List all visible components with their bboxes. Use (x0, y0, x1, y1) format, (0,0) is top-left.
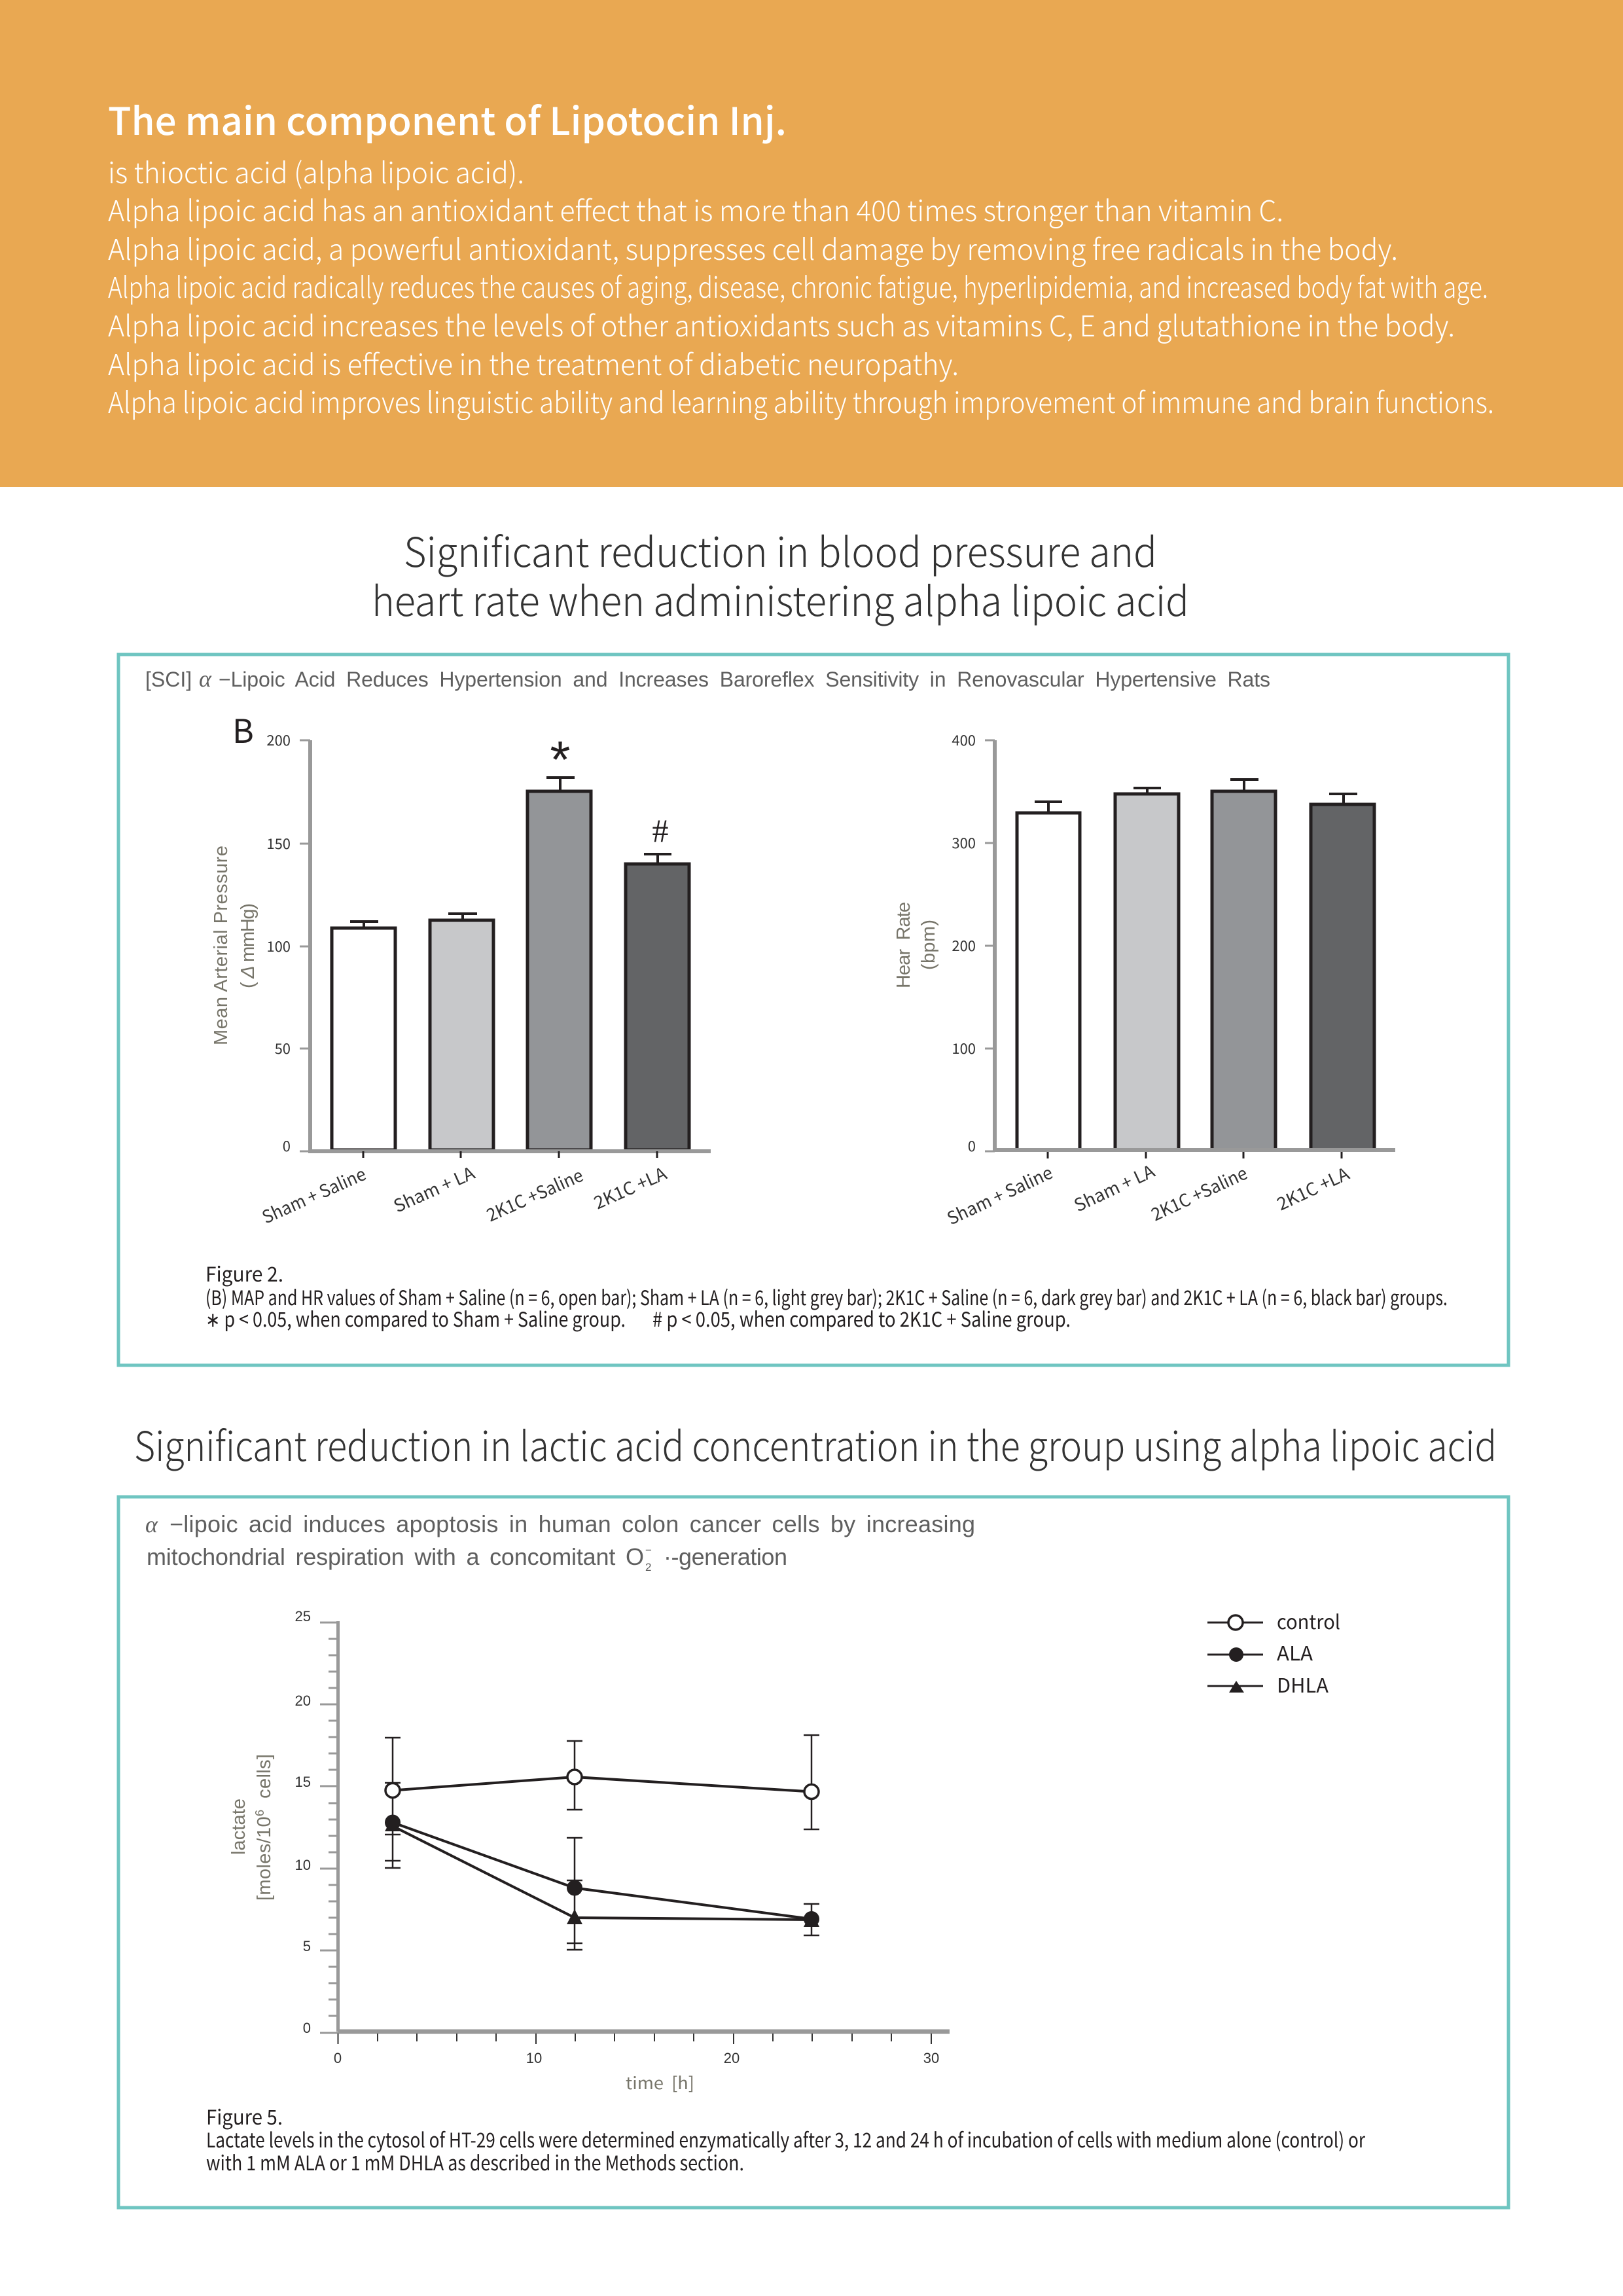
error bars (385, 1735, 819, 1950)
line chart: lactate levels: time [h] (626, 2070, 694, 2094)
bar chart: mean arterial pressure (211, 706, 711, 1229)
heading: blood pressure and heart rate (372, 520, 1189, 628)
bar chart: heart rate: 0 (968, 1135, 976, 1156)
line chart: lactate levels: 25 (295, 1608, 311, 1624)
panel title: −Lipoic Acid Reduces Hypertension and Increases Baroreflex Sensitivity in Renovascular Hypertensive Rats (219, 668, 1270, 691)
bar chart: mean arterial pressure: Mean Arterial Pressure (211, 846, 232, 1045)
figure 5 caption: Figure 5. (206, 2101, 283, 2130)
bar chart: mean arterial pressure: ( Δ mmHg) (238, 903, 259, 988)
panel title: −lipoic acid induces apoptosis in human colon cancer cells by increasing (169, 1511, 975, 1537)
banner body text (108, 150, 1494, 422)
bar chart: heart rate: 300 (952, 832, 976, 853)
figure 5 caption: with 1 mM ALA or 1 mM DHLA as described in the Methods section. (206, 2147, 744, 2176)
line chart: lactate levels (228, 1606, 1340, 2094)
line chart: lactate levels: 20 (295, 1693, 311, 1709)
bar chart: heart rate: Sham + Saline (942, 1158, 1056, 1230)
line chart: lactate levels: 20 (724, 2050, 740, 2066)
panel title: − (645, 1544, 652, 1556)
heading: blood pressure and heart rate: Significant reduction in blood pressure and (404, 520, 1157, 579)
banner body text: is thioctic acid (alpha lipoic acid). (108, 150, 524, 192)
bar chart: mean arterial pressure: 150 (266, 833, 291, 853)
banner body text: Alpha lipoic acid is effective in the treatment of diabetic neuropathy. (108, 342, 959, 384)
bar chart: heart rate: 200 (952, 935, 976, 956)
line chart: lactate levels: 30 (923, 2050, 939, 2066)
heading: blood pressure and heart rate: heart rate when administering alpha lipoic acid (372, 569, 1189, 628)
bar chart: heart rate: Sham + LA (1069, 1157, 1159, 1217)
bar chart: mean arterial pressure: 100 (266, 935, 291, 956)
figure 2 caption: Figure 2. (205, 1258, 283, 1287)
figure 5 caption: Lactate levels in the cytosol of HT-29 cells were determined enzymatically after 3, 12 and 24 h of incubation of cells with medium alone (control) or (206, 2124, 1366, 2153)
bar chart: heart rate: Hear Rate (893, 902, 914, 988)
bar chart: heart rate: 400 (952, 729, 976, 750)
figure 2 caption (205, 1258, 1448, 1333)
line chart: lactate levels: [moles/10 (254, 1816, 275, 1901)
header banner (0, 0, 1623, 487)
figure 2 caption: ∗ p < 0.05, when compared to Sham + Saline group. (205, 1303, 626, 1333)
bar chart: heart rate (893, 729, 1395, 1230)
bar chart: mean arterial pressure: 2K1C +LA (589, 1159, 671, 1214)
bar chart: mean arterial pressure: 2K1C +Saline (482, 1161, 587, 1227)
line chart: lactate levels: lactate (228, 1799, 249, 1855)
heading: lactic acid concentration: Significant reduction in lactic acid concentration in the group using alpha lipoic acid (134, 1414, 1497, 1473)
series: DHLA (385, 1817, 819, 1927)
bar chart: heart rate: 100 (952, 1037, 976, 1058)
panel title: 2 (645, 1561, 651, 1573)
legend: control (1277, 1606, 1340, 1635)
line chart: lactate levels: 0 (334, 2050, 342, 2066)
bar chart: heart rate: (bpm) (918, 920, 939, 970)
bar chart: mean arterial pressure: * (550, 730, 571, 789)
line chart: lactate levels: 15 (295, 1774, 311, 1790)
series: ALA (385, 1814, 819, 1927)
bar chart: mean arterial pressure: # (652, 812, 669, 849)
panel title: mitochondrial respiration with a concomitant O (147, 1543, 644, 1570)
bar chart: mean arterial pressure: B (232, 706, 254, 753)
line chart: lactate levels: 10 (526, 2050, 542, 2066)
panel title: α (199, 666, 212, 692)
bar chart: mean arterial pressure: Sham + Saline (257, 1160, 370, 1229)
banner body text: Alpha lipoic acid has an antioxidant effect that is more than 400 times stronger than vitamin C. (108, 188, 1283, 230)
panel title: α (145, 1511, 158, 1537)
figure 5 caption (206, 2101, 1366, 2176)
banner body text: Alpha lipoic acid increases the levels of other antioxidants such as vitamins C, E and glutathione in the body. (108, 303, 1455, 345)
line chart: lactate levels: 6 (253, 1810, 266, 1816)
panel title (145, 1511, 975, 1573)
banner body text: Alpha lipoic acid improves linguistic ability and learning ability through improvement of immune and brain functions. (108, 380, 1494, 422)
line chart: lactate levels: 10 (295, 1857, 311, 1873)
panel title: [SCI] (145, 668, 192, 691)
bar chart: mean arterial pressure: 50 (275, 1037, 291, 1058)
series: control (385, 1770, 819, 1799)
bar chart: mean arterial pressure: 0 (283, 1135, 291, 1156)
bar chart: heart rate: 2K1C +Saline (1147, 1159, 1251, 1226)
legend (1207, 1606, 1340, 1698)
bar chart: mean arterial pressure: Sham + LA (389, 1159, 478, 1217)
panel: blood pressure study (118, 655, 1508, 1365)
banner title: The main component of Lipotocin Inj. (108, 91, 787, 146)
line chart: lactate levels: cells] (254, 1754, 275, 1810)
line chart: lactate levels: 5 (303, 1938, 311, 1954)
panel title: ·-generation (664, 1543, 787, 1570)
banner body text: Alpha lipoic acid, a powerful antioxidant, suppresses cell damage by removing free radicals in the body. (108, 226, 1398, 268)
legend: ALA (1277, 1638, 1313, 1666)
figure 2 caption: # p < 0.05, when compared to 2K1C + Saline group. (652, 1303, 1071, 1333)
legend: DHLA (1277, 1670, 1329, 1698)
panel: lactic acid study (118, 1497, 1508, 2208)
bar chart: mean arterial pressure: 200 (266, 729, 291, 750)
line chart: lactate levels: 0 (303, 2020, 311, 2036)
bar chart: heart rate: 2K1C +LA (1272, 1160, 1353, 1215)
